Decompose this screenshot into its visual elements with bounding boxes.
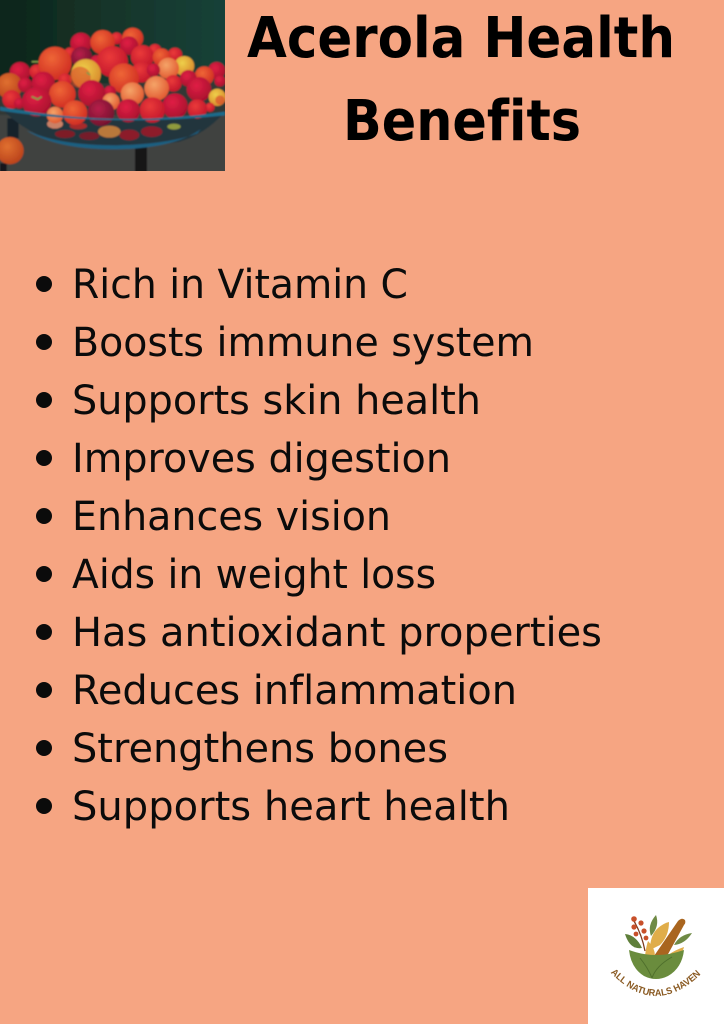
logo: All Naturals Haven: ALL NATURALS HAVEN	[610, 970, 700, 996]
benefits list: Supports heart health	[72, 782, 510, 830]
benefits list: Improves digestion	[72, 434, 451, 482]
benefits list: Supports skin health	[72, 376, 481, 424]
title: Acerola Health	[247, 6, 675, 71]
icon: mortar, pestle and herbs	[625, 915, 692, 979]
photo: bowl of acerola cherries	[0, 0, 230, 177]
logo: All Naturals Haven	[588, 888, 724, 1024]
benefits list: Enhances vision	[72, 492, 391, 540]
benefits list	[36, 260, 602, 830]
benefits list: Rich in Vitamin C	[72, 260, 408, 308]
benefits list: Aids in weight loss	[72, 550, 436, 598]
logo text	[609, 971, 704, 996]
benefits list: Reduces inflammation	[72, 666, 517, 714]
benefits list: Strengthens bones	[72, 724, 448, 772]
benefits list: Has antioxidant properties	[72, 608, 602, 656]
title	[247, 6, 675, 154]
title: Benefits	[343, 89, 581, 154]
benefits list: Boosts immune system	[72, 318, 534, 366]
